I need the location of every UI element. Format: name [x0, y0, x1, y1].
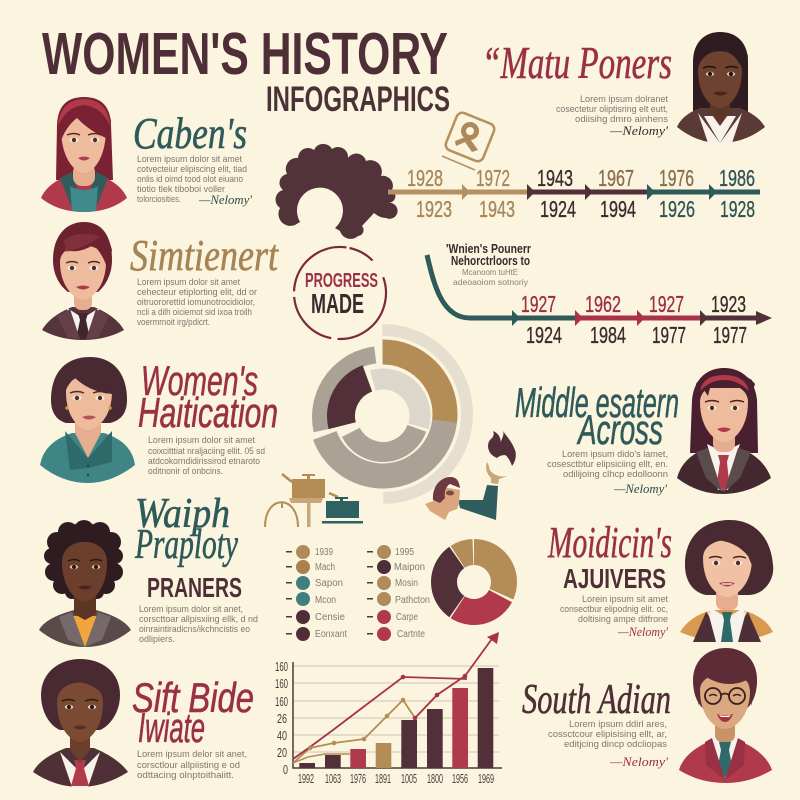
text block: Middle esatern	[547, 449, 668, 496]
title: INFOGRAPHICS	[266, 80, 450, 119]
icon: kitchen pots	[265, 474, 363, 527]
timeline 1: 1928	[407, 165, 443, 191]
text block: South Adian: Lorem ipsum ddirl ares,	[569, 719, 667, 730]
timeline 1: 1943	[479, 196, 515, 222]
chart: bar and line chart: 160	[275, 659, 288, 674]
portrait: Middle esatern	[677, 368, 771, 494]
heading: Women's Haitication	[138, 357, 278, 436]
text block: Simtienert: voermrnoit irg/pdicrt.	[137, 317, 210, 328]
legend: 1995	[395, 547, 414, 558]
text block: Women's Pioneer note: 'Wnien's Pounerr	[446, 241, 531, 256]
legend: Mosin	[395, 578, 418, 589]
legend: Eonxant	[315, 629, 347, 640]
heading: Caben's: Caben's	[133, 109, 247, 158]
badge: progress made: PROGRESS	[305, 270, 378, 292]
heading: Women's Haitication: Women's	[141, 357, 258, 404]
text block: South Adian: —Nelomy'	[609, 754, 668, 769]
chart: bar and line chart: 26	[277, 711, 287, 726]
timeline 1: 1928	[720, 196, 755, 222]
portrait: South Adian	[679, 648, 772, 783]
text block: Matu Poners: cosectetur oliptisring elt eutt,	[556, 104, 668, 115]
legend: Pathcton	[395, 595, 430, 606]
text block: Simtienert: Lorem ipsum dolor sit amet	[137, 277, 240, 288]
badge: progress made: MADE	[311, 288, 364, 319]
legend	[286, 545, 430, 641]
text block: Waiph Praploty: corscttoar allpisxiing ellk, d nd	[139, 614, 258, 625]
legend: Carpe	[396, 612, 418, 623]
text block: Caben's: —Nelomy'	[198, 192, 252, 207]
text block: Women's Haitication: oditnonir of onbcins.	[148, 466, 223, 477]
text block: Moidicin's: —Nelomy'	[617, 624, 668, 639]
text block: Women's Pioneer note: adeoaoiom sotnoriy	[453, 277, 529, 287]
text block: Matu Poners: Lorem ipsum dolranet	[580, 94, 668, 105]
text block: Waiph Praploty: Lorem ipsum dolor sit anet,	[139, 604, 243, 615]
text block: Caben's: tiotio tlek tiboboi voller	[137, 184, 225, 195]
text block: Women's Pioneer note	[446, 241, 531, 287]
text block: Matu Poners	[556, 94, 668, 138]
portrait: Sift Bide	[33, 659, 128, 787]
portrait: Waiph Praploty	[39, 520, 131, 647]
text block: Women's Haitication: Lorem ipsum dolor sit amet	[148, 435, 255, 446]
portrait: Matu Poners	[677, 32, 765, 143]
text block: Middle esatern: cosesctbtur elipsiciing ellt, en.	[547, 459, 668, 470]
text block: Simtienert: oitruororettid iomunotrocidiolor,	[137, 297, 255, 308]
icon: afro hair silhouette	[276, 144, 398, 239]
timeline 2: 1962	[585, 291, 621, 317]
chart: bar and line chart: 1891	[375, 771, 391, 786]
chart: bar and line chart: 40	[277, 728, 287, 743]
heading: Waiph Praploty Praners: PRANERS	[147, 572, 242, 603]
heading: Sift Bide Iwiate: Iwiate	[138, 704, 205, 751]
text block: South Adian: cossctcour elipisising ellt, ar,	[548, 729, 667, 740]
heading: South Adian: South Adian	[522, 677, 671, 723]
chart: bar and line chart: 160	[275, 676, 288, 691]
badge: progress made	[285, 238, 395, 348]
chart: bar and line chart: 1063	[325, 771, 341, 786]
legend: Mach	[315, 562, 335, 573]
portrait: Moidicin's	[680, 520, 773, 642]
heading: Moidicin's Ajuivers	[547, 518, 672, 594]
text block: Women's Pioneer note: Mcanoom tuHtE	[462, 267, 518, 277]
chart: bar and line chart: 20	[277, 745, 287, 760]
timeline 1: 1967	[598, 165, 634, 191]
timeline 1: 1994	[600, 196, 636, 222]
heading: Middle esatern Across: Across	[576, 406, 663, 453]
timeline 1: 1924	[540, 196, 576, 222]
chart: concentric donut	[299, 330, 467, 498]
text block: Matu Poners: odiisihg dmro ainhens	[575, 114, 668, 125]
title	[42, 21, 450, 119]
text block: Waiph Praploty: oinraintiradicns/ikchncistis eo	[139, 624, 250, 635]
text block: Sift Bide: corsctlour allpiisting e od	[137, 760, 240, 771]
text block: Waiph Praploty: odlipiers.	[139, 634, 175, 645]
heading: Middle esatern Across	[515, 379, 679, 453]
chart: bar and line chart: 1005	[401, 771, 417, 786]
chart: bar and line chart	[275, 632, 502, 786]
timeline 2: 1927	[521, 291, 556, 317]
heading: Sift Bide Iwiate	[132, 674, 254, 751]
heading: Women's Haitication: Haitication	[138, 389, 278, 436]
timeline 2: 1927	[649, 291, 684, 317]
text block: Women's Pioneer note: Nehorctrloors to	[451, 253, 530, 268]
text block: Waiph Praploty	[139, 604, 258, 645]
text block: Women's Haitication: atdcokorndidirissirod etnaroto	[148, 456, 260, 467]
chart: bar and line chart: 1800	[427, 771, 443, 786]
text block: Caben's: cotvecteiur elipiscing elit, tiad	[137, 164, 247, 175]
timeline 2: 1977	[652, 322, 686, 348]
text block: Sift Bide: Lorem ipsum delor sit anet,	[137, 749, 247, 760]
text block: Sift Bide	[137, 749, 247, 781]
chart: bar and line chart: 1956	[452, 771, 468, 786]
text block: South Adian: editjcing dincp odcliopas	[564, 739, 667, 750]
chart: pie donut	[432, 540, 516, 624]
text block: Moidicin's: doltising ampe ditfrone	[578, 614, 668, 625]
legend: Maipon	[394, 562, 425, 573]
timeline 1	[388, 165, 760, 222]
icon: figure holding flame	[425, 431, 516, 520]
chart: bar and line chart: 160	[275, 694, 288, 709]
text block: Sift Bide: odttacing olnptoithaiitt.	[137, 770, 234, 781]
timeline 2: 1923	[711, 291, 746, 317]
text block: Simtienert	[137, 277, 257, 328]
legend: Censie	[315, 612, 345, 623]
heading: Sift Bide Iwiate: Sift Bide	[132, 674, 254, 721]
timeline 1: 1972	[476, 165, 510, 191]
timeline 1: 1986	[719, 165, 755, 191]
chart: bar and line chart: 1992	[298, 771, 314, 786]
heading: Simtienert: Simtienert	[130, 231, 279, 280]
icon: ribbon badge	[442, 111, 496, 170]
legend: Sapon	[315, 578, 343, 589]
timeline 2: 1924	[526, 322, 562, 348]
heading: Waiph Praploty Praners	[134, 491, 242, 603]
text block: South Adian	[548, 719, 668, 769]
legend: 1939	[315, 547, 333, 558]
portrait: Women's Haitication	[40, 357, 135, 483]
timeline 2: 1984	[590, 322, 626, 348]
text block: Middle esatern: odilijoing clhcp edolloonn	[563, 469, 668, 480]
text block: Middle esatern: Lorem ipsum dido's lamet,	[562, 449, 668, 460]
timeline 1: 1923	[416, 196, 452, 222]
text block: Caben's: Lorem ipsum dolor sit amet	[137, 154, 242, 165]
timeline 2: 1977	[713, 322, 747, 348]
heading: Waiph Praploty Praners: Praploty	[134, 522, 238, 568]
text block: Moidicin's	[560, 594, 668, 639]
chart: bar and line chart: 1976	[350, 771, 366, 786]
text block: Matu Poners: —Nelomy'	[609, 123, 668, 138]
text block: Simtienert: cehecteur etiplorting elit, dd or	[137, 287, 257, 298]
timeline 2	[427, 255, 772, 348]
text block: Caben's: onlis id oimd tood olot eiuano	[137, 174, 243, 185]
text block: Simtienert: ncli a dilh oiciemot sid ixoa troilh	[137, 307, 252, 318]
heading: Middle esatern Across: Middle esatern	[515, 379, 679, 426]
text block: Women's Haitication	[148, 435, 265, 477]
title: WOMEN'S HISTORY	[42, 21, 448, 87]
text block: Moidicin's: consectbur elipodnig elit. oc,	[560, 604, 668, 615]
text block: Caben's	[137, 154, 252, 207]
heading: Moidicin's Ajuivers: AJUIVERS	[563, 563, 666, 594]
timeline 1: 1976	[659, 165, 694, 191]
legend: Mcon	[315, 595, 336, 606]
timeline 1: 1943	[537, 165, 573, 191]
portrait: Simtienert	[42, 222, 124, 340]
portrait: Caben's	[41, 97, 127, 212]
text block: Women's Haitication: coixcitttiat nraljaciing ellit. 05 sd	[148, 446, 265, 457]
chart: bar and line chart: 1969	[478, 771, 494, 786]
heading: Matu Poners: “Matu Poners	[482, 37, 672, 88]
legend: Cartnte	[397, 629, 425, 640]
text block: Caben's: tolorciosities.	[137, 194, 181, 205]
chart: bar and line chart: 0	[283, 762, 288, 777]
heading: Waiph Praploty Praners: Waiph	[135, 491, 230, 537]
timeline 1: 1926	[659, 196, 695, 222]
text block: Middle esatern: —Nelomy'	[613, 481, 667, 496]
heading: Moidicin's Ajuivers: Moidicin's	[547, 518, 672, 567]
text block: Moidicin's: Lorein ipsum sit amet	[582, 594, 668, 605]
